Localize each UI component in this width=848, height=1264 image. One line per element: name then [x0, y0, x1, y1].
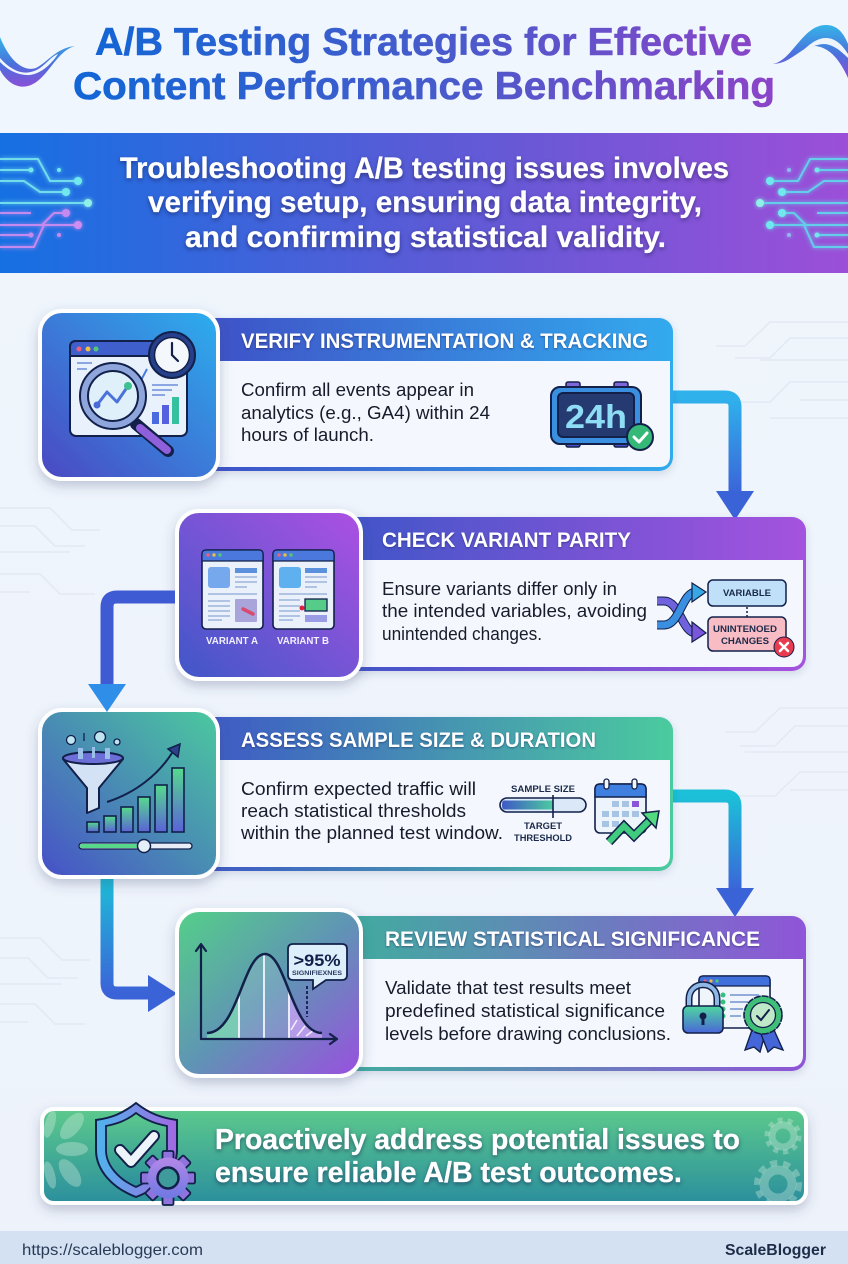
- step 1 heading: VERIFY INSTRUMENTATION & TRACKING: [241, 330, 648, 353]
- icon: variable crossing arrows: CHANGES: [721, 636, 769, 647]
- icon: sample size bar: SAMPLE SIZE: [511, 784, 575, 794]
- panel: assess sample size: [40, 710, 673, 877]
- step 4 heading: REVIEW STATISTICAL SIGNIFICANCE: [385, 928, 760, 951]
- footer bar: [0, 1231, 848, 1264]
- step 4 icon tile: [177, 910, 361, 1076]
- step 4 text: Validate that test results meet: [385, 978, 631, 998]
- icon: browser analytics with magnifier and clock: [70, 332, 195, 451]
- background circuit pattern: [0, 322, 848, 1024]
- step 2 text: [382, 579, 647, 644]
- icon: lock and certification badge: [683, 976, 783, 1052]
- icon: sample size bar: THRESHOLD: [514, 833, 573, 843]
- step 2 icon tile: [177, 511, 361, 679]
- arrow: step 3 to step 4 left: [107, 875, 177, 1012]
- panel: check variant parity: [177, 511, 806, 679]
- icon: variable crossing arrows: VARIABLE: [723, 588, 771, 599]
- circuit decoration left: [0, 159, 92, 247]
- icon: 24h timer: 24h: [565, 398, 627, 435]
- icon: sample size bar: TARGET: [524, 821, 563, 831]
- banner text: Troubleshooting A/B testing issues involves: [120, 152, 729, 185]
- icon: bell curve with significance callout: >95%: [294, 951, 340, 970]
- arrow: step 2 to step 3: [88, 597, 175, 712]
- step 3 text: reach statistical thresholds: [241, 801, 466, 821]
- step 4 text: [385, 978, 671, 1044]
- icon: calendar with growth arrow: [595, 779, 659, 842]
- step 2 text: unintended changes.: [382, 624, 542, 644]
- brand name: ScaleBlogger: [725, 1242, 826, 1259]
- title: A/B Testing Strategies for Effective: [95, 21, 752, 64]
- banner: [0, 133, 848, 273]
- step 4 text: predefined statistical significance: [385, 1001, 665, 1021]
- step 1 card: [200, 318, 673, 471]
- step 1 text: hours of launch.: [241, 425, 374, 445]
- circuit decoration right: [756, 159, 848, 247]
- callout text: [215, 1124, 740, 1189]
- step 4 text: levels before drawing conclusions.: [385, 1024, 671, 1044]
- icon: sample size bar: [500, 784, 586, 843]
- arrow: step 1 to step 2: [670, 397, 754, 520]
- title: Content Performance Benchmarking: [73, 65, 775, 108]
- step 3 heading: ASSESS SAMPLE SIZE & DURATION: [241, 729, 596, 752]
- callout text: Proactively address potential issues to: [215, 1124, 740, 1156]
- icon: variable crossing arrows: [657, 580, 794, 657]
- step 4 card: [340, 916, 806, 1071]
- icon: shield with check and gear: [96, 1103, 195, 1205]
- icon: variable crossing arrows: UNINTENOED: [713, 624, 777, 635]
- step 3 icon tile: [40, 710, 218, 877]
- banner text: and confirming statistical validity.: [185, 221, 666, 254]
- icon: funnel and growing bars: [63, 732, 192, 852]
- decorative wave top right: [772, 25, 848, 78]
- step 3 text: [240, 779, 503, 843]
- icon: bell curve with significance callout: SIGNIFIEXNES: [292, 970, 343, 977]
- step 3 text: Confirm expected traffic will: [241, 779, 476, 799]
- step 2 text: Ensure variants differ only in: [382, 579, 617, 599]
- icon: 24h timer: [551, 382, 653, 450]
- panel: review significance: [177, 910, 806, 1076]
- arrow: step 3 to step 4: [670, 796, 754, 917]
- step 2 card: [340, 517, 806, 671]
- step 2 heading: CHECK VARIANT PARITY: [382, 529, 631, 552]
- step 1 icon tile: [40, 311, 218, 479]
- step 1 text: analytics (e.g., GA4) within 24: [241, 403, 490, 423]
- callout text: ensure reliable A/B test outcomes.: [215, 1157, 682, 1189]
- step 3 card: [200, 717, 673, 871]
- banner text: [120, 152, 729, 254]
- step 2 text: the intended variables, avoiding: [382, 601, 647, 621]
- website url: https://scaleblogger.com: [22, 1242, 203, 1259]
- icon: variant A and variant B windows: [202, 550, 334, 647]
- icon: variant A and variant B windows: VARIANT B: [277, 635, 329, 647]
- decorative wave top left: [0, 37, 75, 87]
- icon: bell curve with significance callout: [196, 944, 347, 1044]
- title: [73, 21, 775, 108]
- decorative gears: [757, 1120, 799, 1205]
- icon: variant A and variant B windows: VARIANT A: [206, 635, 258, 647]
- step 1 text: [241, 380, 490, 445]
- decorative flower: [44, 1111, 88, 1189]
- panel: closing callout: [42, 1103, 806, 1205]
- step 3 text: within the planned test window.: [240, 823, 503, 843]
- step 1 text: Confirm all events appear in: [241, 380, 474, 400]
- panel: verify instrumentation: [40, 311, 673, 479]
- banner text: verifying setup, ensuring data integrity,: [148, 186, 702, 219]
